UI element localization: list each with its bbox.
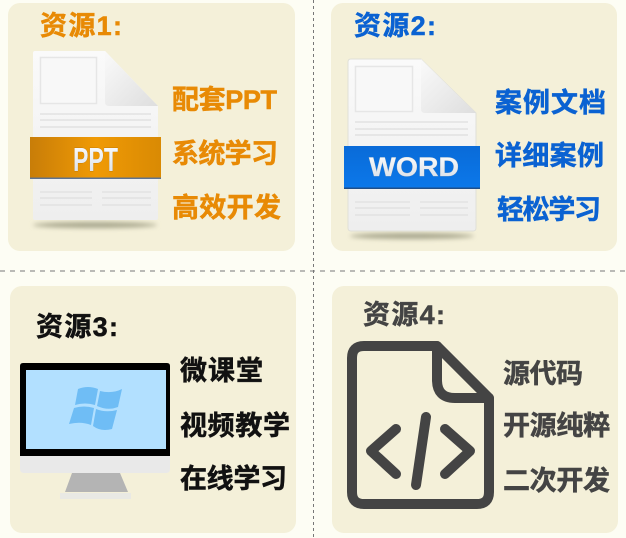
icon: monitor: [20, 363, 170, 499]
panel: resource 2: [331, 3, 617, 251]
heading: resource 4: 资源4:: [363, 300, 445, 330]
list: resource 4 features: 开源纯粹: [503, 411, 610, 441]
heading: resource 3: 资源3:: [36, 312, 118, 342]
list: resource 1 features: [172, 85, 281, 223]
list: resource 3 features: 微课堂: [180, 356, 263, 386]
list: resource 1 features: 高效开发: [172, 193, 281, 223]
list: resource 3 features: 视频教学: [180, 411, 290, 441]
list: resource 4 features: 源代码: [503, 359, 583, 389]
list: resource 3 features: 在线学习: [180, 464, 287, 494]
panel: resource 1: [8, 3, 295, 251]
panel: resource 3: [10, 286, 296, 533]
list: resource 4 features: 二次开发: [503, 466, 610, 496]
list: resource 2 features: 案例文档: [495, 88, 606, 118]
icon: window logo: [69, 387, 122, 430]
heading: resource 1: 资源1:: [40, 11, 122, 41]
list: resource 1 features: 配套PPT: [172, 85, 278, 115]
icon: WORD document: [344, 59, 480, 239]
icon: code file: [352, 346, 489, 504]
icon: WORD document: WORD: [369, 152, 459, 182]
panel: resource 4: [332, 286, 618, 533]
icon: PPT document: PPT: [73, 141, 118, 178]
list: resource 1 features: 系统学习: [172, 139, 278, 169]
list: resource 3 features: [180, 356, 290, 494]
heading: resource 2: 资源2:: [354, 11, 436, 41]
list: resource 2 features: [495, 88, 606, 225]
list: resource 4 features: [503, 359, 610, 496]
list: resource 2 features: 详细案例: [495, 141, 604, 171]
icon: PPT document: [30, 51, 161, 228]
list: resource 2 features: 轻松学习: [497, 195, 601, 225]
